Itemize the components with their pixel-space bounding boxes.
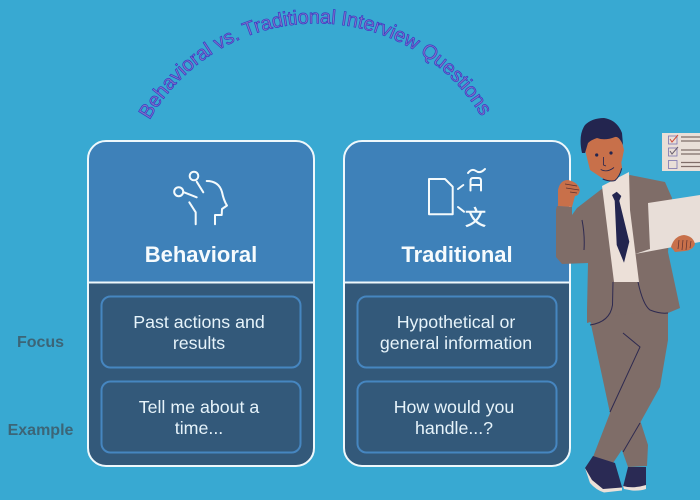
- head: [581, 118, 624, 181]
- back leg: [610, 413, 648, 467]
- box: behavioral example: time...: [175, 418, 223, 438]
- pant creases: [610, 333, 640, 452]
- box: behavioral focus: Past actions and: [133, 312, 265, 332]
- heading: traditional: Traditional: [401, 242, 513, 267]
- box: traditional focus: Hypothetical or: [397, 312, 515, 332]
- box: traditional example: How would you: [394, 397, 514, 417]
- box: traditional focus: [358, 296, 556, 368]
- shirt: [602, 172, 639, 282]
- icon: checklist card: [662, 133, 700, 171]
- box: behavioral focus: results: [173, 333, 225, 353]
- title: Behavioral vs. Traditional Interview Questions: [138, 9, 490, 120]
- panel: behavioral: [88, 141, 314, 466]
- left hand: [558, 180, 580, 207]
- row label: example: Example: [8, 422, 74, 439]
- icon: document translation: [429, 169, 486, 230]
- front leg: [590, 305, 668, 463]
- laptop: [635, 195, 700, 254]
- illustration: businessman: [556, 118, 700, 492]
- panel: traditional: [344, 141, 570, 466]
- heading: behavioral: Behavioral: [145, 242, 257, 267]
- right shoe: [623, 467, 646, 491]
- box: behavioral focus: [102, 296, 300, 368]
- tie: [612, 192, 629, 263]
- box: traditional focus: general information: [380, 333, 532, 353]
- jacket: [556, 175, 680, 323]
- box: traditional example: [358, 382, 556, 452]
- box: behavioral example: Tell me about a: [139, 397, 259, 417]
- box: traditional example: handle...?: [415, 418, 493, 438]
- left shoe: [585, 456, 622, 492]
- row label: focus: Focus: [17, 334, 64, 351]
- right hand: [671, 235, 695, 252]
- icon: document translation: 文: [465, 207, 486, 230]
- icon: head with nodes: [174, 172, 227, 224]
- jacket lines: [582, 220, 668, 325]
- box: behavioral example: [102, 382, 300, 452]
- neck: [603, 160, 622, 181]
